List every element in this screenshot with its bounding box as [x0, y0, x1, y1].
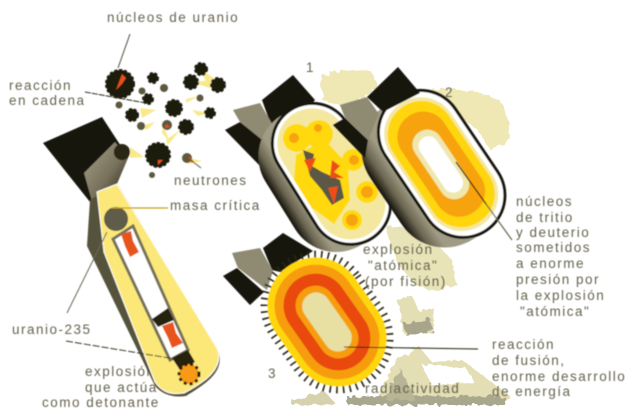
lower tail 2 — [333, 118, 368, 158]
fireball — [249, 239, 405, 405]
leader line: núcleos de tritio — [456, 162, 486, 204]
label: núcleos de tritio y deuterio: núcleos — [516, 194, 573, 209]
target uranium piece — [121, 231, 139, 257]
label: explosión detonante: que actúa — [85, 380, 158, 395]
fireball outer — [249, 239, 405, 405]
label: reacción en cadena — [9, 78, 86, 108]
leader line: reacción en cadena — [85, 92, 146, 103]
label: explosión atómica por fisión: explosión — [363, 242, 434, 257]
label: uranio-235: uranio-235 — [12, 322, 92, 337]
nuclei — [106, 63, 225, 167]
label: radiactividad: radiactividad — [365, 381, 460, 396]
interior 1 — [264, 95, 399, 253]
collar 1 — [233, 103, 274, 148]
fireball red — [271, 261, 383, 383]
leader line: uranio-235 lower — [66, 341, 175, 359]
leader line: masa crítica — [112, 207, 168, 209]
lower tail 3 — [223, 268, 264, 305]
leader line: reacción de fusión — [344, 347, 478, 349]
casing 1 — [257, 88, 406, 260]
charge block — [172, 350, 195, 370]
radiation spikes — [244, 235, 410, 409]
heat band bright — [375, 88, 508, 240]
label: núcleos de tritio y deuterio: a enorme — [516, 256, 585, 271]
fireball inner orange — [288, 278, 366, 366]
white clearing in smoke — [422, 364, 474, 386]
label: explosión atómica por fisión: (por fisión) — [365, 274, 447, 289]
lower tail 1 — [225, 122, 272, 168]
tail 3 black — [263, 233, 313, 272]
label: núcleos de tritio y deuterio: y deuterio — [516, 225, 590, 240]
label: reacción de fusión: enorme desarrollo — [492, 369, 626, 384]
label: núcleos de tritio y deuterio: presión por — [516, 272, 600, 287]
detonating explosion — [179, 364, 199, 384]
label: núcleos de tritio y deuterio: de tritio — [516, 210, 574, 225]
panel: gun-type fission bomb — [43, 117, 220, 397]
bomb yellow body — [97, 184, 219, 394]
label: explosión detonante — [42, 364, 160, 410]
heat band pale — [407, 124, 475, 205]
white core — [415, 132, 467, 197]
fission fragments — [303, 150, 344, 205]
collar 3 — [232, 248, 273, 290]
small grey nuclei — [114, 84, 204, 178]
label: núcleos de tritio y deuterio: la explosión — [516, 288, 605, 303]
label: reacción de fusión — [492, 337, 626, 399]
label: stage number 3: 3 — [268, 366, 277, 381]
shell 2 — [341, 74, 521, 268]
heat band orange — [388, 102, 495, 227]
label: stage number 2: 2 — [445, 85, 454, 100]
tail 1 — [262, 75, 315, 128]
label: núcleos de tritio y deuterio: "atómica" — [520, 304, 590, 319]
label: núcleos de uranio: núcleos de uranio — [107, 10, 239, 25]
label: reacción de fusión: reacción — [492, 337, 555, 352]
casing 2 — [362, 74, 521, 254]
panel: bomb stage 2 — [333, 67, 521, 268]
label: explosión atómica por fisión: "atómica" — [368, 258, 438, 273]
tail collar — [84, 142, 128, 205]
bomb tail — [43, 117, 128, 202]
leader line: uranio-235 upper — [67, 232, 107, 313]
uranium mass — [104, 207, 128, 231]
label: masa crítica: masa crítica — [170, 198, 261, 213]
panel: bomb stage 3 — [223, 233, 478, 409]
piston — [152, 308, 174, 327]
shell 1 — [240, 88, 406, 270]
neutron trails — [130, 69, 218, 164]
label: reacción en cadena: en cadena — [9, 93, 86, 108]
fireball core — [297, 287, 357, 357]
label: neutrones: neutrones — [174, 173, 248, 188]
bullet uranium piece — [162, 322, 183, 348]
label: reacción en cadena: reacción — [9, 78, 72, 93]
tail 2 — [367, 67, 420, 112]
collar 2 — [340, 97, 379, 140]
fission sparks — [116, 74, 195, 165]
orange hot spots — [289, 124, 373, 226]
label: reacción de fusión: de energía — [492, 384, 572, 399]
label: reacción de fusión: de fusión, — [492, 353, 566, 368]
label: explosión atómica por fisión — [363, 242, 447, 289]
label: núcleos de tritio y deuterio — [516, 194, 605, 319]
label: stage number 1: 1 — [306, 60, 315, 75]
chain reaction nuclei group — [85, 34, 225, 178]
label: explosión detonante: explosión — [85, 364, 156, 379]
fission blobs — [283, 120, 378, 230]
inner tube — [113, 226, 188, 360]
bomb shell shadow — [87, 183, 220, 397]
leader line: neutrones — [188, 158, 201, 168]
smoke cloud behind bombs — [292, 70, 510, 405]
label: explosión detonante: como detonante — [42, 395, 160, 410]
panel: bomb stage 1 — [225, 75, 406, 270]
leader line: núcleos de uranio — [118, 34, 130, 68]
heat band yellow — [370, 83, 512, 245]
fireball orange — [258, 249, 396, 395]
label: núcleos de tritio y deuterio: sometidos — [516, 240, 591, 255]
